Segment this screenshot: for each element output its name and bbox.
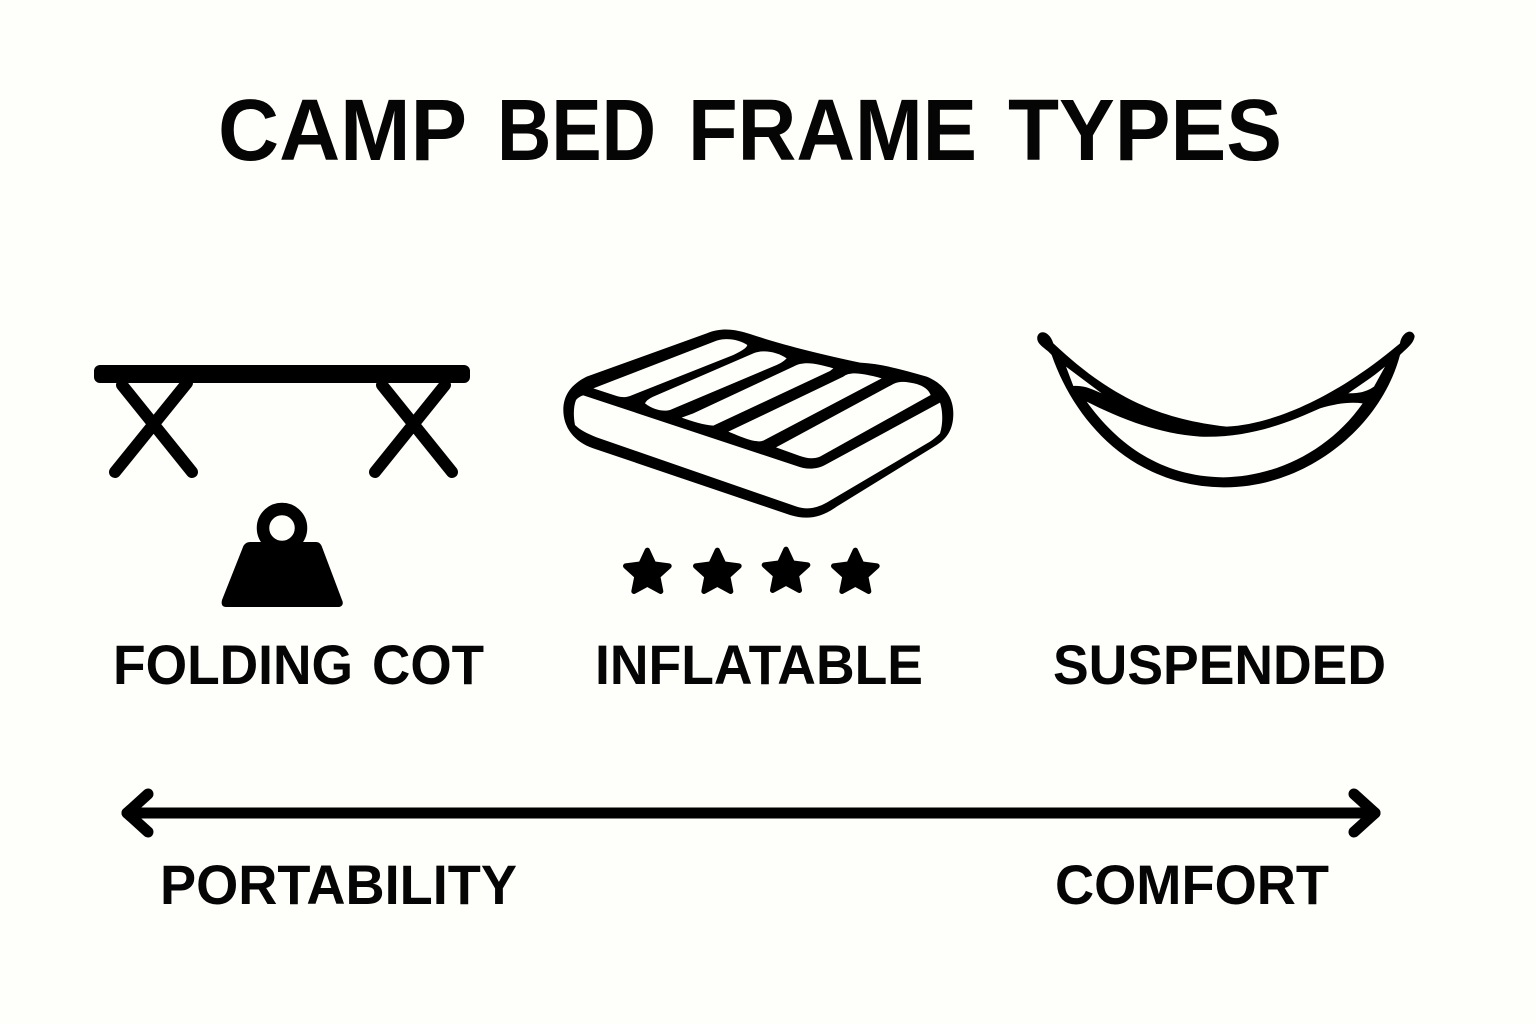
- label: folding cot: FOLDING: [113, 633, 353, 696]
- label: inflatable: INFLATABLE: [595, 633, 923, 696]
- label: suspended: SUSPENDED: [1053, 633, 1386, 696]
- title: [218, 82, 1282, 179]
- label: portability: PORTABILITY: [160, 853, 517, 916]
- title: FRAME: [688, 82, 977, 179]
- title: CAMP: [218, 82, 467, 179]
- icon: weight: [222, 509, 343, 607]
- icon: hammock: [1037, 332, 1415, 487]
- label: folding cot: [113, 633, 484, 696]
- label: folding cot: COT: [372, 633, 484, 696]
- title: TYPES: [1008, 82, 1282, 179]
- arrow: portability to comfort: [127, 794, 1375, 832]
- icon: folding cot: [94, 365, 470, 472]
- title: BED: [497, 82, 656, 179]
- icon: inflatable mattress: [563, 330, 953, 518]
- icon: four stars: [626, 549, 877, 591]
- label: comfort: COMFORT: [1055, 853, 1329, 916]
